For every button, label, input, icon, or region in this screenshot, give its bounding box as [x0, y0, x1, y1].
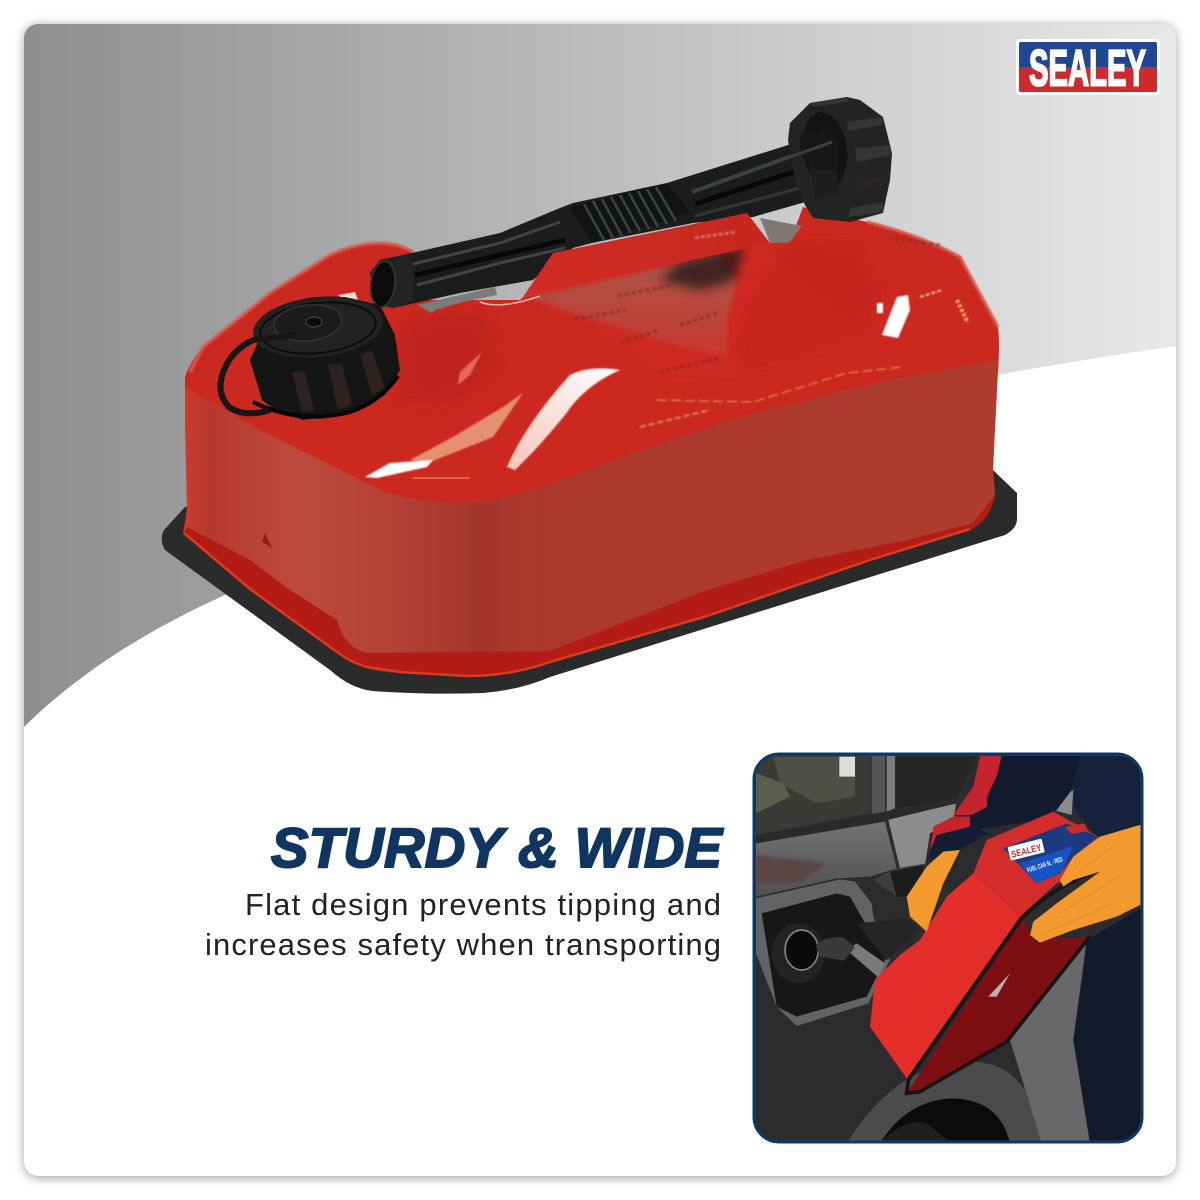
body text: increases safety when transporting [205, 927, 721, 962]
body text [205, 887, 721, 962]
can front face [183, 360, 997, 677]
can label [1003, 823, 1098, 883]
hose and nozzle [850, 944, 885, 977]
rear quarter panel [1010, 940, 1090, 1143]
dark strap reflection [660, 245, 745, 290]
can front face [870, 873, 1020, 1078]
filler cap [220, 290, 400, 420]
gloves [907, 850, 960, 932]
upper car door panels [756, 822, 897, 897]
worker jacket [1073, 756, 1143, 840]
inset photo: pouring fuel into car: SEALEY [1010, 842, 1043, 860]
grey reflection in panel [530, 255, 737, 357]
bright rim line [184, 529, 970, 676]
product: red jerry can [162, 97, 1017, 694]
can lip [907, 870, 1102, 1093]
black flap [890, 865, 923, 897]
spout [369, 135, 837, 308]
corrugated section [570, 183, 690, 243]
worker trousers [1073, 907, 1143, 1143]
spout holder strap [480, 213, 770, 305]
can base gasket [162, 470, 1017, 694]
can underside [907, 917, 1090, 1093]
fuel recess [762, 893, 887, 1017]
spout nut [692, 97, 892, 222]
can top face [973, 812, 1102, 917]
car body lower [753, 753, 1143, 1143]
red reflection right of panel [735, 240, 880, 370]
highlights on can [262, 290, 968, 548]
valley around the filler cap [400, 313, 495, 405]
rim light on shoulders [190, 222, 998, 372]
dark red lower band [183, 495, 995, 677]
body text: Flat design prevents tipping and [245, 887, 721, 922]
filler neck [772, 923, 825, 983]
inset photo: pouring fuel into car [753, 753, 1143, 1143]
fuel door surround [756, 879, 890, 1026]
raised panel shading [525, 245, 860, 383]
heading: STURDY & WIDE [271, 816, 724, 879]
windows [756, 756, 870, 835]
can body silhouette [183, 207, 999, 677]
embossed lettering shadows [575, 238, 940, 372]
inset photo: pouring fuel into car: FUEL CAN 5L - RED [1026, 856, 1064, 874]
inset frame [754, 754, 1142, 1142]
grey reflections under spout [417, 287, 497, 313]
wheel arch [847, 1061, 1042, 1143]
